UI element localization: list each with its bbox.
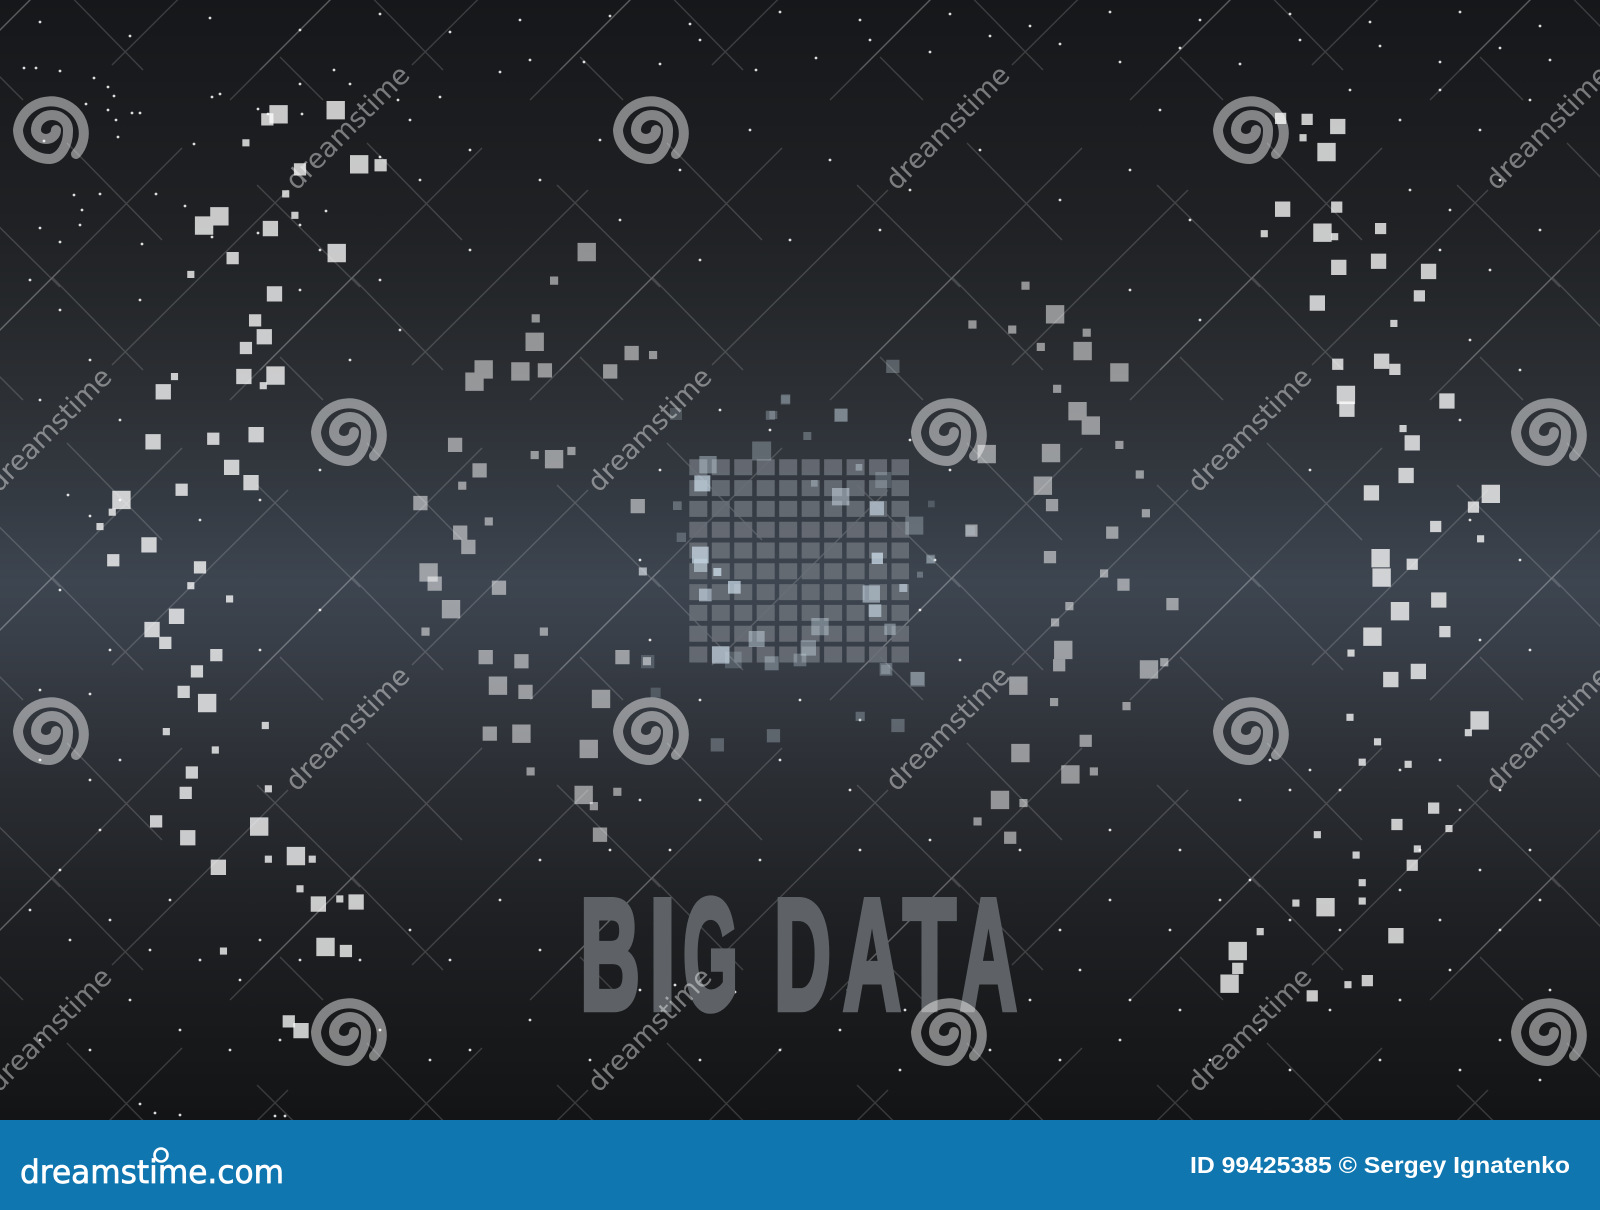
infographic canvas: A (960, 867, 1017, 1043)
watermark spirals (18, 101, 1582, 1061)
title: BIG DATA: T (903, 867, 956, 1043)
inner left particle wave (420, 252, 653, 835)
left particle wave (100, 110, 381, 1031)
watermark words: dreamstime (880, 661, 1016, 797)
title: BIG DATA: I (649, 867, 676, 1043)
watermark words: dreamstime (1182, 362, 1318, 498)
title: BIG DATA: A (843, 867, 901, 1043)
inner right particle wave (971, 286, 1172, 838)
watermark words: dreamstime (582, 962, 718, 1098)
footer bar (0, 1120, 1600, 1210)
central data grid (689, 467, 909, 654)
particles around the grid (717, 366, 970, 745)
title: BIG DATA (580, 867, 1017, 1043)
watermark words: dreamstime (582, 362, 718, 498)
watermark words: dreamstime (280, 60, 416, 196)
title: BIG DATA: G (683, 867, 738, 1043)
title: BIG DATA: D (774, 867, 831, 1043)
image credit: ID 99425385 © Sergey Ignatenko (1190, 1152, 1570, 1178)
bright squares over the grid (643, 400, 931, 693)
watermark words: dreamstime (880, 60, 1016, 196)
footer logo: dreamstime.com (20, 1153, 284, 1191)
watermark words: dreamstime (1182, 962, 1318, 1098)
title: BIG DATA: B (580, 867, 640, 1043)
watermark words: dreamstime (280, 661, 416, 797)
right particle wave (1230, 118, 1491, 996)
